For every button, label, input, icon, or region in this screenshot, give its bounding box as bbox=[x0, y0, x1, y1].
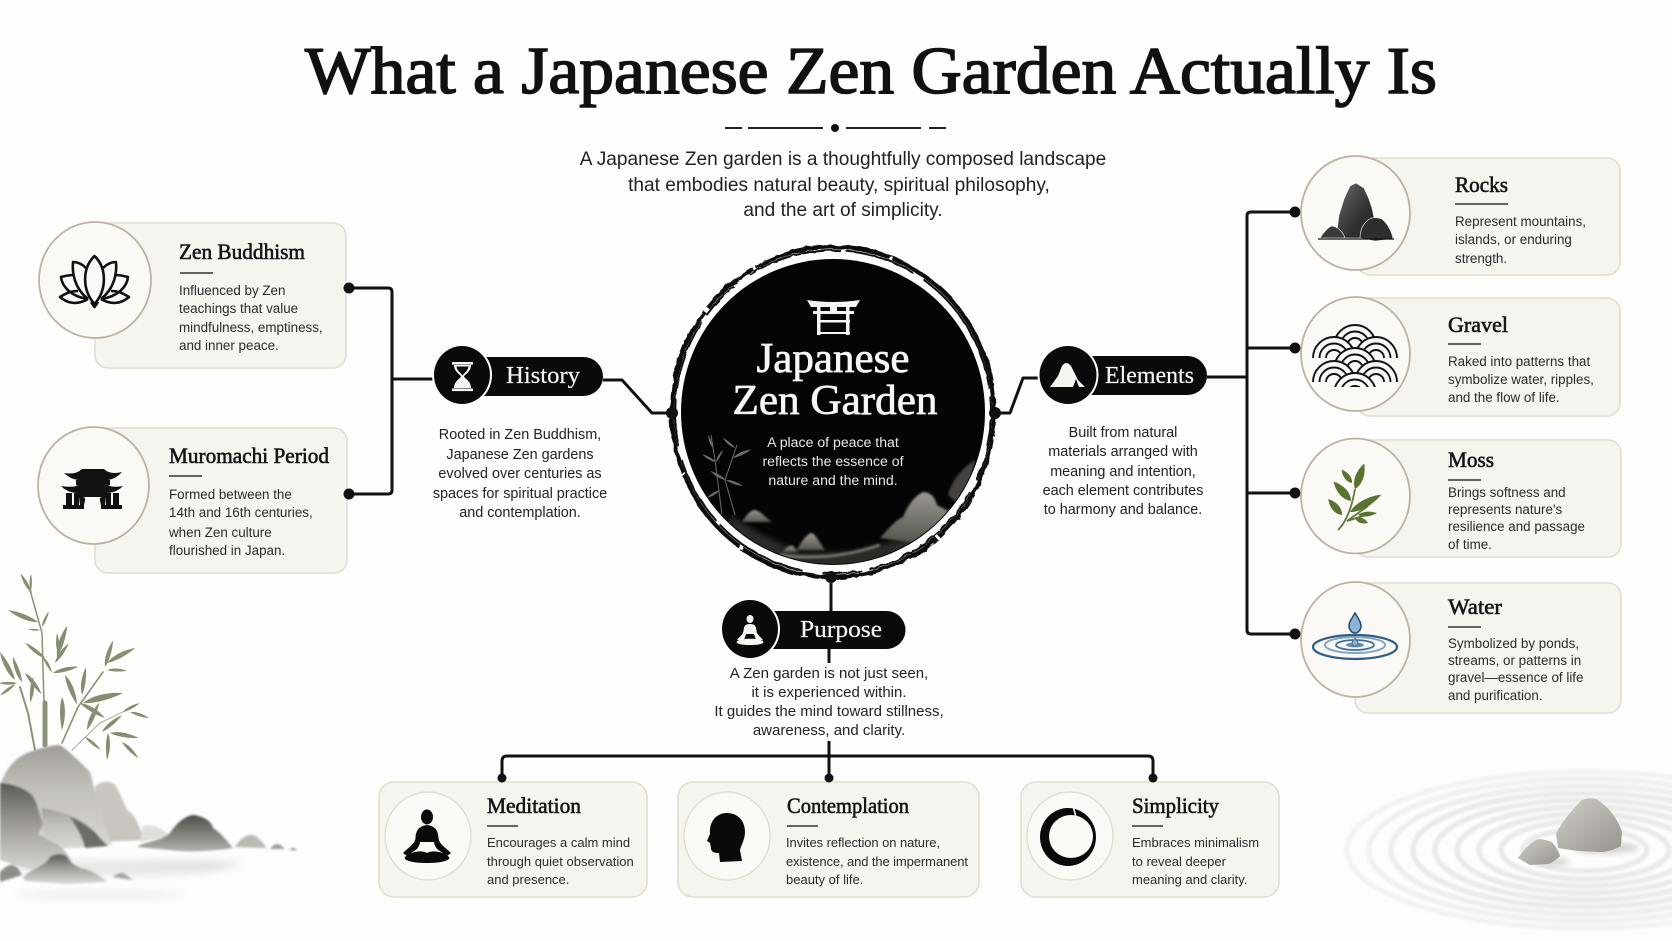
heading: Water bbox=[1448, 594, 1503, 619]
description: and the flow of life. bbox=[1448, 390, 1560, 405]
panel: Meditation bbox=[379, 782, 647, 897]
intro text: and the art of simplicity. bbox=[743, 200, 943, 221]
text: purpose summary: A Zen garden is not just seen, bbox=[730, 665, 928, 682]
description: Formed between the bbox=[169, 487, 292, 502]
text: elements summary: each element contributes bbox=[1043, 483, 1203, 499]
text: purpose summary: it is experienced within. bbox=[751, 684, 907, 701]
icon: enso circle bbox=[1040, 806, 1096, 866]
intro text: that embodies natural beauty, spiritual philosophy, bbox=[628, 175, 1050, 196]
center description: nature and the mind. bbox=[768, 472, 898, 488]
panel: Rocks bbox=[1301, 156, 1620, 275]
badge: Elements bbox=[1038, 344, 1207, 406]
description: islands, or enduring bbox=[1455, 232, 1572, 247]
description bbox=[1448, 485, 1585, 552]
heading: Zen Buddhism bbox=[179, 239, 305, 264]
connector: elements branches bbox=[995, 206, 1300, 640]
description: streams, or patterns in bbox=[1448, 653, 1581, 668]
description: Invites reflection on nature, bbox=[786, 835, 940, 850]
description: to reveal deeper bbox=[1132, 854, 1227, 869]
text: history summary bbox=[433, 427, 607, 521]
icon: hourglass bbox=[452, 362, 473, 391]
description bbox=[1132, 835, 1259, 887]
icon: temple gate bbox=[61, 469, 123, 509]
description: and inner peace. bbox=[179, 338, 279, 353]
description: Raked into patterns that bbox=[1448, 354, 1590, 369]
description: Encourages a calm mind bbox=[487, 835, 630, 850]
heading: Rocks bbox=[1455, 172, 1508, 197]
text: purpose summary: It guides the mind toward stillness, bbox=[714, 703, 944, 720]
description: Brings softness and bbox=[1448, 485, 1566, 500]
text: elements summary: Built from natural bbox=[1069, 425, 1177, 441]
center description bbox=[762, 434, 904, 488]
text: purpose summary bbox=[714, 665, 944, 739]
description bbox=[168, 487, 313, 558]
panel: Water bbox=[1301, 582, 1621, 713]
description: of time. bbox=[1448, 537, 1492, 552]
title divider bbox=[725, 124, 946, 132]
panel: Moss bbox=[1301, 438, 1621, 557]
description: mindfulness, emptiness, bbox=[179, 320, 323, 335]
text: elements summary: to harmony and balance. bbox=[1044, 502, 1202, 518]
description: and presence. bbox=[487, 872, 569, 887]
badge: History bbox=[432, 344, 603, 406]
description: through quiet observation bbox=[487, 854, 634, 869]
connector: center to purpose bbox=[830, 577, 832, 612]
icon: meditating figure bbox=[737, 615, 763, 645]
text: purpose summary: awareness, and clarity. bbox=[753, 722, 905, 739]
text: history summary: Japanese Zen gardens bbox=[446, 447, 594, 463]
heading: Gravel bbox=[1448, 312, 1508, 337]
text: history summary: evolved over centuries as bbox=[438, 466, 602, 482]
connection dots bbox=[666, 407, 1001, 583]
badge: Purpose bbox=[720, 598, 906, 660]
panel: Zen Buddhism bbox=[39, 222, 346, 368]
text: elements summary: materials arranged with bbox=[1048, 444, 1198, 460]
text: elements summary: meaning and intention, bbox=[1050, 464, 1196, 480]
heading: Contemplation bbox=[787, 793, 909, 818]
heading: Meditation bbox=[487, 793, 581, 818]
description bbox=[1455, 214, 1586, 266]
icon: mountain bbox=[1050, 363, 1085, 387]
text: history summary: spaces for spiritual practice bbox=[433, 486, 607, 502]
icon: head silhouette bbox=[707, 813, 745, 862]
icon: seigaiha waves bbox=[1312, 324, 1398, 387]
center heading: Japanese bbox=[756, 336, 910, 382]
description: 14th and 16th centuries, bbox=[169, 505, 313, 520]
center heading: Zen Garden bbox=[732, 378, 938, 424]
description: gravel—essence of life bbox=[1448, 670, 1583, 685]
center description: A place of peace that bbox=[767, 434, 899, 450]
description bbox=[1448, 636, 1583, 703]
badge: Elements: Elements bbox=[1105, 363, 1194, 389]
connector: history branches bbox=[344, 282, 672, 500]
heading: Simplicity bbox=[1132, 793, 1219, 818]
description: flourished in Japan. bbox=[169, 543, 285, 558]
description: Represent mountains, bbox=[1455, 214, 1586, 229]
description: meaning and clarity. bbox=[1132, 872, 1247, 887]
garden scene in circle bbox=[702, 434, 976, 564]
description: teachings that value bbox=[179, 301, 298, 316]
description: when Zen culture bbox=[168, 525, 272, 540]
description: existence, and the impermanent bbox=[786, 854, 968, 869]
description: Embraces minimalism bbox=[1132, 835, 1259, 850]
center description: reflects the essence of bbox=[762, 453, 904, 469]
description: resilience and passage bbox=[1448, 519, 1585, 534]
icon: meditating silhouette bbox=[403, 810, 451, 863]
description bbox=[786, 835, 968, 887]
intro text: A Japanese Zen garden is a thoughtfully composed landscape bbox=[580, 149, 1106, 170]
description bbox=[487, 835, 634, 887]
description: Influenced by Zen bbox=[179, 283, 285, 298]
heading: Moss bbox=[1448, 447, 1494, 472]
badge: Purpose: Purpose bbox=[800, 617, 882, 643]
description: beauty of life. bbox=[786, 872, 863, 887]
icon: torii gate bbox=[807, 300, 860, 335]
text: history summary: Rooted in Zen Buddhism, bbox=[439, 427, 601, 443]
icon: rocks bbox=[1318, 183, 1394, 241]
illustration: raked gravel ripples with stones bbox=[1347, 772, 1672, 928]
description: strength. bbox=[1455, 251, 1507, 266]
heading: Muromachi Period bbox=[169, 443, 329, 468]
title: What a Japanese Zen Garden Actually Is bbox=[305, 34, 1437, 108]
illustration: bamboo and ink-wash rocks bbox=[0, 572, 298, 899]
central circle: Japanese Zen Garden bbox=[666, 245, 1001, 600]
text: elements summary bbox=[1043, 425, 1203, 518]
panel: Muromachi Period bbox=[38, 427, 347, 573]
intro text bbox=[580, 149, 1106, 221]
description: and purification. bbox=[1448, 688, 1543, 703]
text: history summary: and contemplation. bbox=[459, 505, 581, 521]
connector: purpose tree bbox=[498, 649, 1158, 782]
panel: Contemplation bbox=[678, 782, 979, 897]
description: symbolize water, ripples, bbox=[1448, 372, 1594, 387]
description bbox=[1448, 354, 1594, 405]
description: represents nature's bbox=[1448, 502, 1563, 517]
panel: Gravel bbox=[1301, 297, 1620, 416]
icon: water drop bbox=[1313, 613, 1397, 659]
icon: lotus bbox=[60, 256, 129, 307]
center heading bbox=[732, 336, 938, 424]
badge: History: History bbox=[506, 363, 580, 389]
panel: Simplicity bbox=[1021, 782, 1279, 897]
icon: moss sprig bbox=[1325, 462, 1383, 530]
description: Symbolized by ponds, bbox=[1448, 636, 1579, 651]
description bbox=[179, 283, 323, 353]
